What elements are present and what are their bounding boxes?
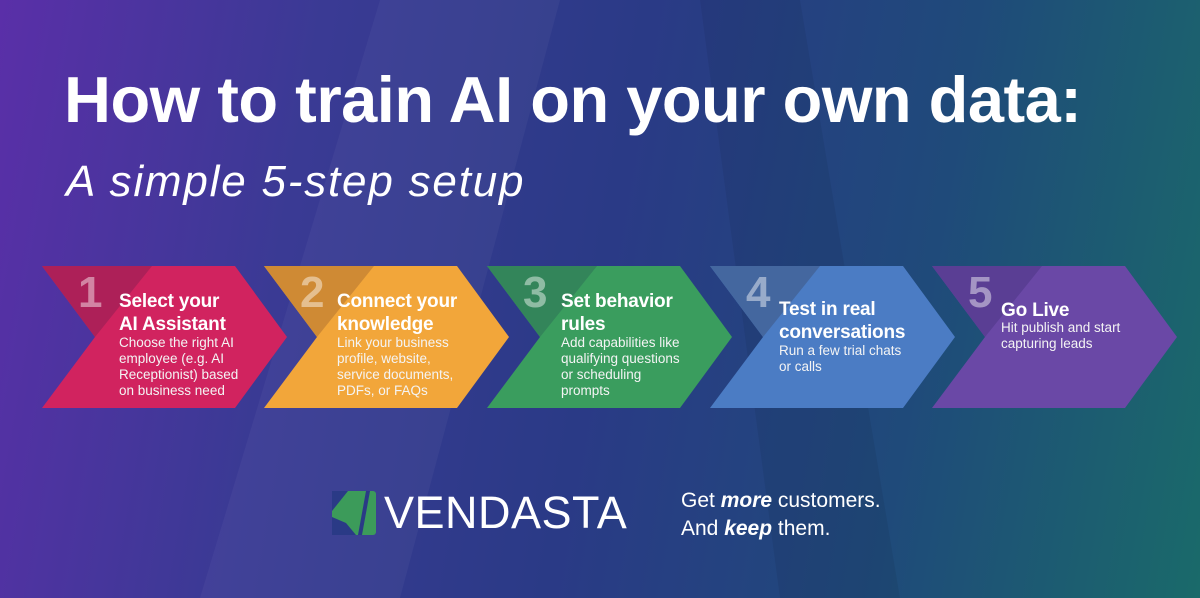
tagline: Get more customers. (681, 489, 881, 512)
step 2: service documents, (337, 367, 453, 382)
step 3: or scheduling (561, 367, 641, 382)
step 5: Go Live (1001, 300, 1069, 321)
step 4: conversations (779, 322, 905, 343)
step 1: Receptionist) based (119, 367, 238, 382)
icon: vendasta mark (332, 491, 376, 535)
step 5 (932, 266, 1177, 408)
step 2: 2 (300, 268, 324, 317)
subtitle: A simple 5-step setup (66, 157, 525, 206)
step 1: on business need (119, 383, 225, 398)
step 4 (710, 266, 955, 408)
step 5: Hit publish and start (1001, 320, 1120, 335)
tagline (681, 489, 881, 540)
step 3: Add capabilities like (561, 335, 680, 350)
step 3: rules (561, 314, 605, 335)
step 3: Set behavior (561, 291, 673, 312)
step 1 (42, 266, 287, 408)
title: How to train AI on your own data: (64, 63, 1081, 136)
step 2: profile, website, (337, 351, 431, 366)
step 5: 5 (968, 268, 992, 317)
step 1: AI Assistant (119, 314, 226, 335)
step 1: Select your (119, 291, 219, 312)
step 5: capturing leads (1001, 336, 1093, 351)
step 2: Link your business (337, 335, 449, 350)
step 3: 3 (523, 268, 547, 317)
step 4: Test in real (779, 299, 876, 320)
step 2 (264, 266, 509, 408)
step 3: qualifying questions (561, 351, 680, 366)
step 4: 4 (746, 268, 770, 317)
step 1: Choose the right AI (119, 335, 234, 350)
step 2: PDFs, or FAQs (337, 383, 428, 398)
tagline: And keep them. (681, 517, 830, 540)
step 3 (487, 266, 732, 408)
step 4: or calls (779, 359, 822, 374)
step 2: knowledge (337, 314, 433, 335)
step 2: Connect your (337, 291, 457, 312)
step 1: 1 (78, 268, 102, 317)
step 3: prompts (561, 383, 610, 398)
logo: vendasta: VENDASTA (384, 487, 627, 538)
step 1: employee (e.g. AI (119, 351, 224, 366)
step 4: Run a few trial chats (779, 343, 901, 358)
